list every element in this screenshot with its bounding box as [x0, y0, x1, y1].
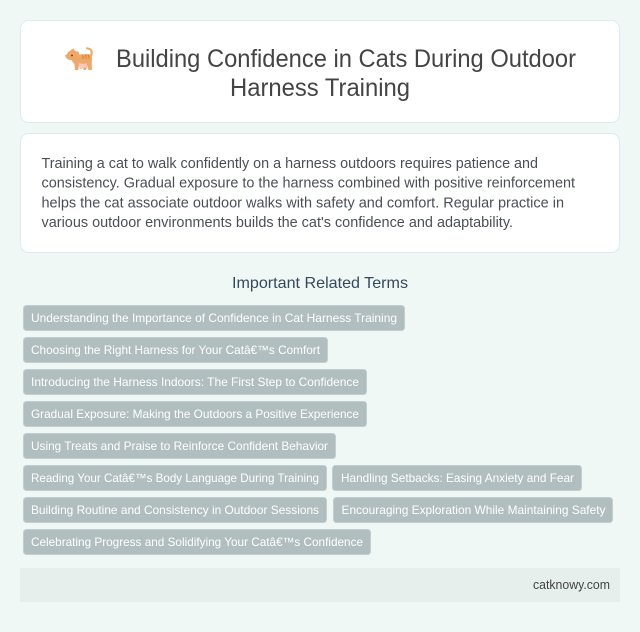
tag — [24, 306, 404, 330]
intro paragraph: various outdoor environments builds the cat's confidence and adaptability. — [42, 214, 513, 231]
heading: related terms: Important Related Terms — [232, 275, 408, 292]
title: Harness Training — [230, 74, 410, 102]
tag — [332, 466, 582, 490]
tag — [24, 370, 366, 394]
tag — [24, 498, 326, 522]
intro paragraph — [42, 155, 576, 231]
tag — [24, 338, 328, 362]
title — [116, 45, 576, 102]
intro paragraph: consistency. Gradual exposure to the harness combined with positive reinforcement — [42, 174, 576, 192]
tag — [24, 530, 370, 554]
title: Building Confidence in Cats During Outdoor — [116, 45, 576, 73]
tag: Choosing the Right Harness for Your Catâ€™s Comfort — [31, 343, 321, 357]
tag: Introducing the Harness Indoors: The First Step to Confidence — [31, 375, 359, 389]
header panel — [20, 20, 620, 122]
footer credit: catknowy.com — [533, 577, 610, 592]
tag: Understanding the Importance of Confidence in Cat Harness Training — [31, 311, 397, 325]
tag — [24, 402, 366, 426]
icon: cat — [65, 47, 93, 70]
tag — [334, 498, 612, 522]
tag: Using Treats and Praise to Reinforce Confident Behavior — [31, 439, 328, 453]
tag: Building Routine and Consistency in Outdoor Sessions — [31, 503, 319, 517]
tag: Encouraging Exploration While Maintaining Safety — [342, 503, 606, 517]
tag: Gradual Exposure: Making the Outdoors a Positive Experience — [31, 407, 359, 421]
tag — [24, 434, 336, 458]
intro paragraph: Training a cat to walk confidently on a harness outdoors requires patience and — [42, 155, 538, 172]
tag: Reading Your Catâ€™s Body Language During Training — [31, 471, 319, 485]
tag — [24, 466, 326, 490]
panel: introduction — [20, 134, 620, 252]
footer — [20, 568, 620, 602]
tag list — [24, 306, 612, 554]
tag: Handling Setbacks: Easing Anxiety and Fear — [341, 471, 574, 485]
tag: Celebrating Progress and Solidifying Your Catâ€™s Confidence — [31, 535, 363, 549]
intro paragraph: helps the cat associate outdoor walks with safety and comfort. Regular practice in — [42, 194, 564, 212]
